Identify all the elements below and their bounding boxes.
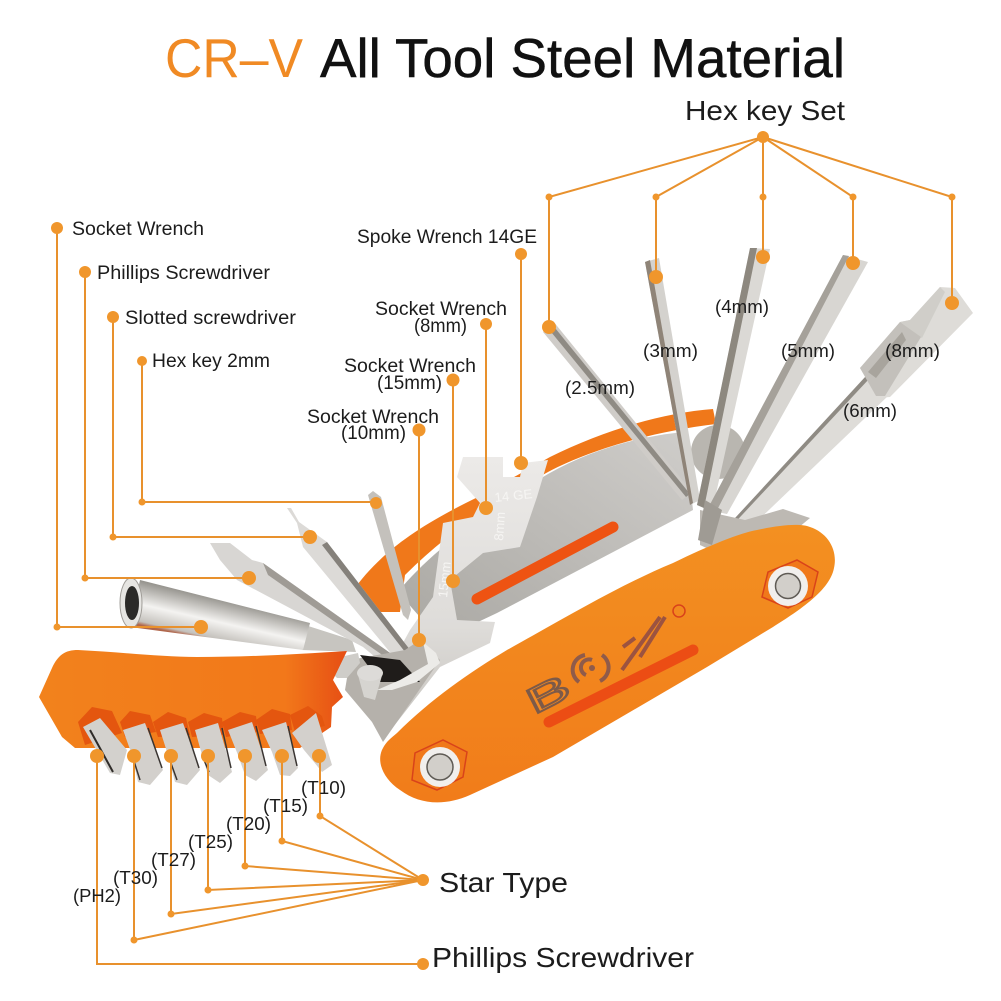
socket opening	[120, 578, 142, 628]
label: Spoke Wrench 14GE: Spoke Wrench 14GE	[357, 227, 537, 248]
wrench engraving: 8mm	[491, 511, 508, 541]
label: Socket Wrench 15mm	[344, 356, 476, 394]
logo slashes	[622, 617, 665, 670]
socket wrench body	[130, 580, 310, 650]
wrench engraving: 14 GE	[494, 486, 533, 505]
bit size labels: (T30)	[113, 868, 158, 888]
label: Socket Wrench 8mm: Socket Wrench	[375, 299, 507, 320]
hinge block shading	[698, 500, 722, 545]
bit size labels: (T25)	[188, 832, 233, 852]
hex key size labels: (3mm)	[643, 341, 698, 361]
leader lines: bits	[97, 756, 423, 964]
label: Socket Wrench 15mm: Socket Wrench	[344, 356, 476, 377]
steel plate	[398, 432, 693, 640]
title: CR–V	[165, 27, 303, 89]
hex key 2mm	[368, 491, 411, 620]
handle red stripe	[549, 650, 693, 722]
label: Socket Wrench 8mm	[375, 299, 507, 337]
hex key size labels	[565, 297, 940, 421]
label: Slotted screwdriver: Slotted screwdriver	[125, 308, 297, 329]
hub disc behind hex keys	[691, 425, 745, 479]
handle bolt right	[762, 560, 818, 608]
hex key 5mm	[707, 255, 868, 514]
hex key 4mm	[697, 248, 770, 512]
bit handle	[39, 650, 347, 748]
phillips screwdriver	[210, 543, 417, 675]
label: Socket Wrench 10mm: Socket Wrench	[307, 407, 439, 428]
bit size labels	[73, 778, 346, 906]
brand logo B: B	[519, 666, 577, 722]
wrench engraving	[435, 486, 533, 598]
label: Socket Wrench 8mm: (8mm)	[414, 316, 467, 337]
hex key size labels: (6mm)	[843, 401, 897, 421]
tool illustration	[39, 248, 973, 802]
hex key size labels: (2.5mm)	[565, 378, 635, 398]
plate slot	[477, 527, 613, 599]
front orange handle	[380, 525, 835, 802]
bit size labels: (T10)	[301, 778, 346, 798]
label: Socket Wrench: Socket Wrench	[72, 219, 204, 240]
socket wrench shaft tail	[302, 625, 356, 652]
hex key size labels: (4mm)	[715, 297, 769, 317]
label: Phillips Screwdriver: Phillips Screwdriver	[97, 263, 271, 284]
heading: Hex key Set: Hex key Set	[685, 95, 845, 126]
bit shadow lines	[132, 726, 297, 780]
bit size labels: (PH2)	[73, 886, 121, 906]
hex keys hinge	[700, 509, 810, 552]
chain wrench tool	[377, 457, 548, 740]
brand logo O	[573, 655, 609, 682]
label: Socket Wrench 15mm: (15mm)	[377, 373, 442, 394]
hex key 3mm	[645, 258, 700, 505]
hex key 6mm with 8mm socket	[724, 287, 973, 530]
star bits	[123, 713, 332, 785]
hinge block	[332, 640, 440, 742]
leader lines: hex keys	[549, 137, 952, 327]
label: Phillips Screwdriver bottom: Phillips Screwdriver	[432, 942, 694, 973]
rear orange handle	[352, 409, 716, 612]
label: Socket Wrench 10mm	[307, 407, 439, 444]
title: All Tool Steel Material	[320, 27, 845, 89]
leader dots: hex keys	[542, 131, 959, 334]
phillips bit	[83, 718, 127, 775]
hex key size labels: (8mm)	[885, 341, 940, 361]
leader lines: left tools	[57, 228, 521, 640]
bit size labels: (T15)	[263, 796, 308, 816]
wrench engraving: 15mm	[435, 561, 454, 598]
handle bolt left	[412, 740, 467, 790]
label: Star Type: Star Type	[439, 867, 568, 898]
hex key size labels: (5mm)	[781, 341, 835, 361]
leader dots: bits	[90, 749, 429, 970]
hex key 2.5mm	[543, 321, 692, 500]
bit size labels: (T20)	[226, 814, 271, 834]
leader dots: left tools	[51, 222, 528, 647]
bit sockets	[78, 706, 325, 745]
registered mark	[673, 605, 685, 617]
slotted screwdriver	[287, 508, 424, 674]
bit size labels: (T27)	[151, 850, 196, 870]
label: Socket Wrench 10mm: (10mm)	[341, 423, 406, 444]
label: Hex key 2mm: Hex key 2mm	[152, 351, 270, 372]
